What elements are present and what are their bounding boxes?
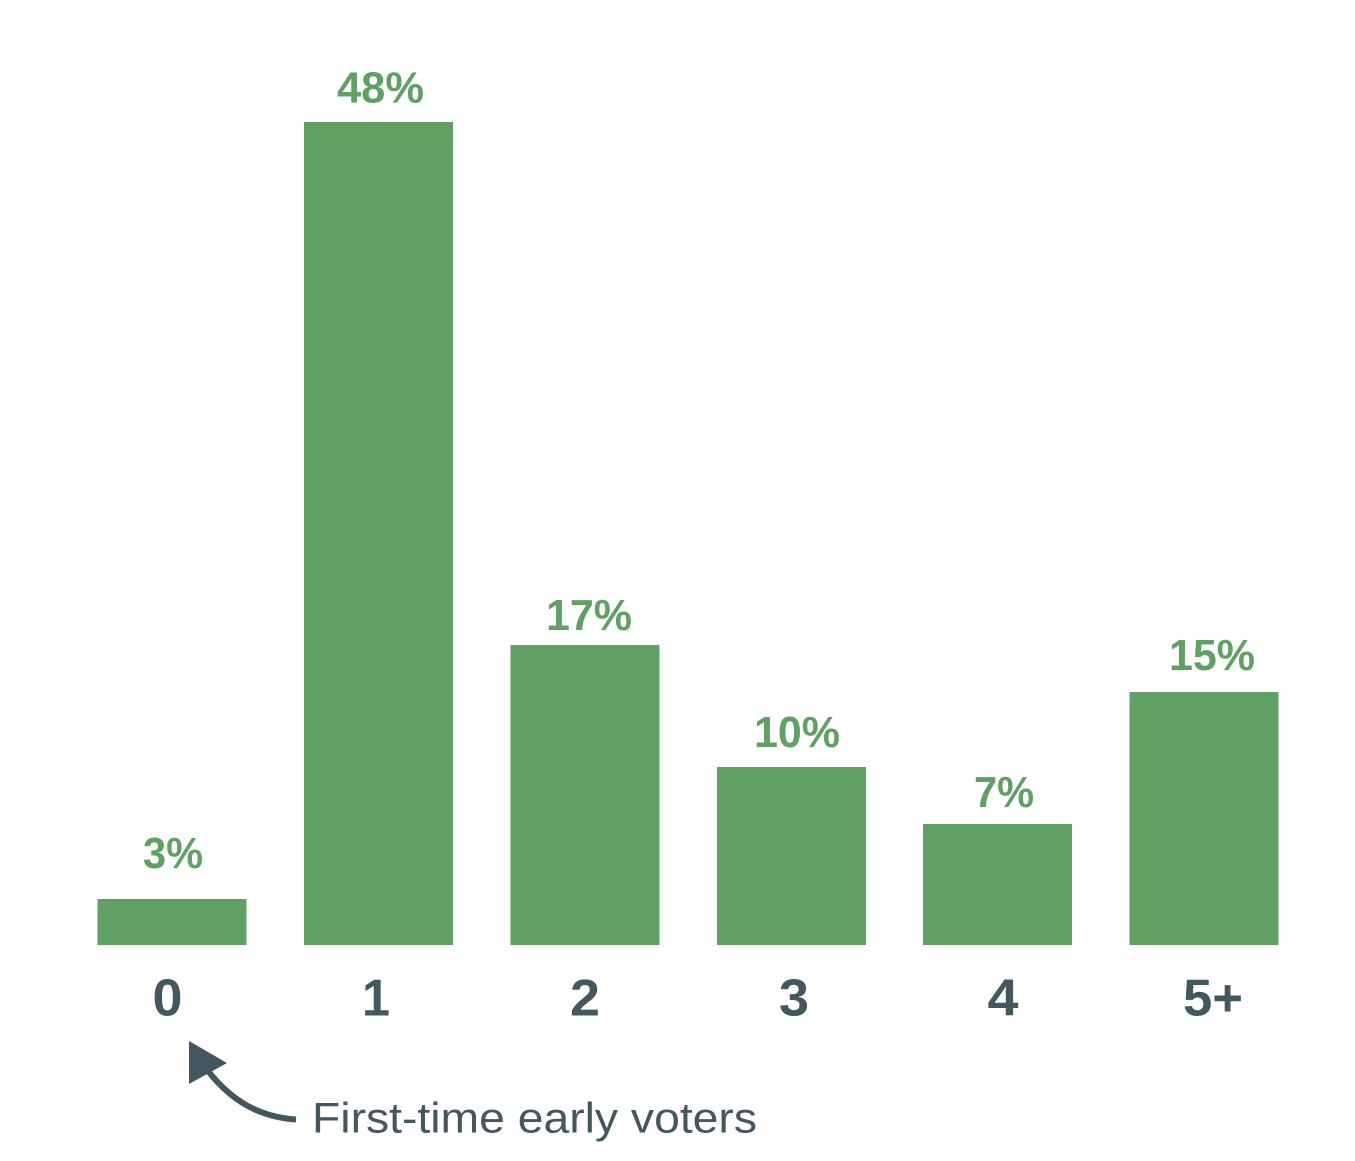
- bar: 4: [923, 824, 1072, 945]
- bar: 5+: [1130, 692, 1278, 945]
- category labels: 2: [570, 970, 600, 1028]
- icon: curved arrow: [189, 1041, 296, 1120]
- bar: 0: [98, 899, 246, 945]
- bar: 3: [717, 767, 866, 945]
- bar: 2: [510, 645, 660, 945]
- category labels: 3: [779, 970, 809, 1028]
- value labels: 10%: [754, 708, 840, 757]
- category labels: 5+: [1183, 970, 1243, 1028]
- callout: first-time early voters: First-time early voters: [312, 1094, 757, 1142]
- value labels: 17%: [546, 591, 632, 640]
- category labels: 4: [988, 970, 1019, 1028]
- bar: 1: [304, 122, 453, 945]
- value labels: 7%: [974, 768, 1034, 817]
- value labels: [143, 64, 1255, 878]
- value labels: 3%: [143, 829, 203, 878]
- value labels: 48%: [337, 64, 424, 112]
- category labels: [152, 970, 1243, 1028]
- value labels: 15%: [1169, 631, 1255, 680]
- category labels: 0: [152, 970, 182, 1028]
- category labels: 1: [362, 970, 390, 1028]
